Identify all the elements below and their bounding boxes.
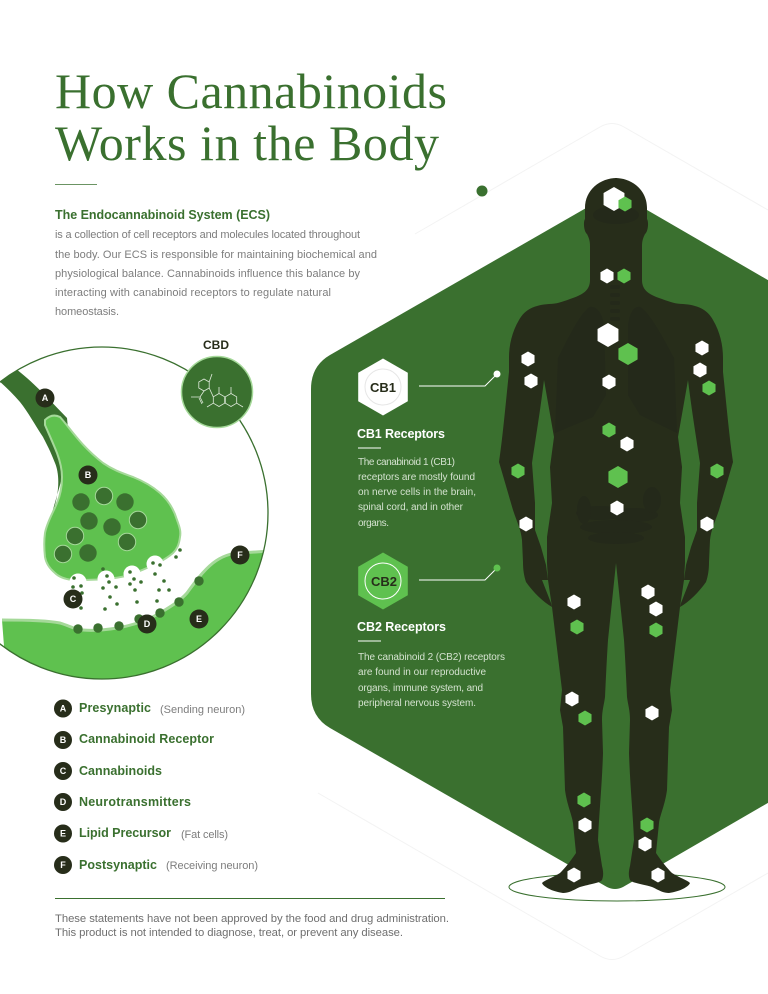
- CB2 text block: The canabinoid 2 (CB2) receptors: [358, 652, 505, 663]
- CB1 connector: [419, 370, 500, 386]
- legend item F: [54, 856, 258, 874]
- CB1 text block: The canabinoid 1 (CB1): [358, 457, 455, 468]
- intro text block: interacting with canabinoid receptors to regulate natural: [55, 287, 331, 299]
- CB2 text block: [357, 620, 505, 709]
- legend item D: D: [60, 797, 67, 807]
- human body silhouette: [499, 178, 733, 893]
- white CB1 receptor markers: [519, 187, 714, 882]
- green CB2 receptor markers: [511, 196, 724, 832]
- legend item C: C: [60, 766, 67, 776]
- legend item A: Presynaptic: [79, 701, 151, 715]
- legend item F: F: [60, 860, 66, 870]
- intro text block: is a collection of cell receptors and molecules located throughout: [55, 229, 360, 241]
- CB1 text block: on nerve cells in the brain,: [358, 487, 476, 498]
- diagram letter markers: C: [70, 594, 77, 604]
- title: How Cannabinoids: [55, 63, 447, 119]
- decorative dot: [476, 186, 488, 196]
- intro text block: homeostasis.: [55, 306, 119, 318]
- legend item D: Neurotransmitters: [79, 795, 191, 809]
- CB1 badge: CB1: [370, 380, 396, 395]
- presynaptic axon: [0, 370, 68, 510]
- postsynaptic neuron: [2, 553, 262, 678]
- receptor dots: [73, 576, 204, 634]
- legend item E: [54, 824, 228, 842]
- internal organs: [555, 206, 677, 544]
- legend item A: A: [60, 704, 67, 714]
- CB1 text block: CB1 Receptors: [357, 427, 445, 441]
- intro text block: the body. Our ECS is responsible for maintaining biochemical and: [55, 249, 377, 261]
- title: Works in the Body: [55, 115, 439, 171]
- legend item A: (Sending neuron): [160, 704, 245, 716]
- legend item B: B: [60, 735, 67, 745]
- synaptic gap scallops: [70, 556, 164, 596]
- CBD molecule callout: CBD: [203, 338, 229, 352]
- CB1 badge: [358, 358, 408, 416]
- CB2 text block: peripheral nervous system.: [358, 698, 476, 709]
- diagram letter markers: B: [85, 470, 92, 480]
- diagram letter markers: D: [144, 619, 151, 629]
- CB1 text block: [357, 427, 476, 529]
- diagram letter markers: A: [42, 393, 49, 403]
- CB2 connector: [419, 564, 500, 580]
- legend item C: [54, 762, 162, 780]
- legend item E: Lipid Precursor: [79, 826, 171, 840]
- legend: [54, 700, 258, 874]
- CB2 text block: organs, immune system, and: [358, 683, 483, 694]
- diagram letter markers: F: [237, 550, 243, 560]
- cannabinoid particles: [71, 548, 182, 611]
- legend item F: (Receiving neuron): [166, 860, 258, 872]
- legend item B: Cannabinoid Receptor: [79, 732, 214, 746]
- intro text block: The Endocannabinoid System (ECS): [55, 208, 270, 222]
- platform ellipse: [509, 873, 725, 901]
- intro text block: [55, 208, 377, 318]
- disclaimer: This product is not intended to diagnose, treat, or prevent any disease.: [55, 927, 403, 939]
- legend item D: [54, 793, 191, 811]
- CB2 badge: CB2: [371, 574, 397, 589]
- synapse diagram: [0, 347, 270, 690]
- legend item E: E: [60, 828, 66, 838]
- CB2 text block: CB2 Receptors: [357, 620, 446, 634]
- legend item F: Postsynaptic: [79, 858, 157, 872]
- legend item B: [54, 731, 214, 749]
- CBD molecule callout: [182, 338, 252, 428]
- title: [55, 63, 447, 171]
- legend item C: Cannabinoids: [79, 764, 162, 778]
- CB1 text block: organs.: [358, 518, 389, 529]
- CB2 text block: are found in our reproductive: [358, 667, 486, 678]
- CB1 text block: spinal cord, and in other: [358, 502, 464, 513]
- presynaptic bulb: [44, 416, 180, 580]
- disclaimer: These statements have not been approved by the food and drug administration.: [55, 913, 449, 925]
- legend item A: [54, 700, 245, 718]
- CB1 text block: receptors are mostly found: [358, 472, 475, 483]
- green hexagon panel: [311, 194, 768, 889]
- legend item E: (Fat cells): [181, 829, 228, 841]
- diagram letter markers: [36, 388, 250, 634]
- disclaimer: [55, 913, 449, 939]
- intro text block: physiological balance. Cannabinoids influence this balance by: [55, 268, 360, 280]
- vesicles: [54, 487, 147, 563]
- CB2 badge: [358, 552, 408, 610]
- diagram letter markers: E: [196, 614, 202, 624]
